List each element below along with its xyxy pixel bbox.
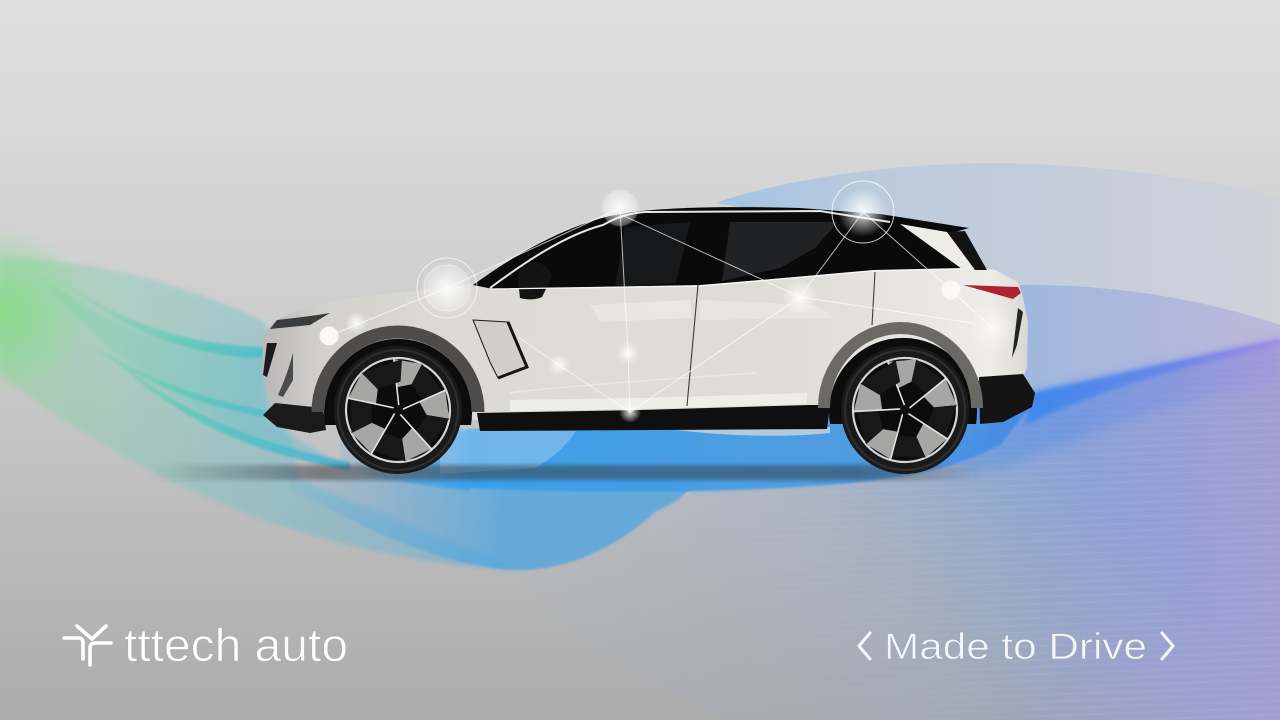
- wave: violet right tint: [1000, 340, 1280, 720]
- node: door left: [548, 354, 570, 376]
- silver roof trim: [490, 211, 890, 288]
- wave: pale arc under front door: [440, 430, 576, 474]
- wave: lower teal edge: [100, 345, 350, 470]
- car: [262, 207, 1035, 489]
- wave: right blue band: [1000, 285, 1280, 400]
- wave: bright ribbon: [1025, 338, 1280, 425]
- wave: teal fill between edges: [40, 275, 350, 470]
- node: front halo: [345, 312, 367, 334]
- window glare front door: [615, 222, 690, 287]
- rear wheel arch: [824, 328, 977, 424]
- node: rear corner: [968, 304, 1016, 352]
- wave: left pale sweep: [0, 258, 520, 570]
- flowing data waves: [0, 163, 1280, 720]
- window glare rear door: [722, 222, 838, 281]
- node: roof front sensor: [600, 188, 640, 228]
- logo: tttech auto: [64, 619, 348, 671]
- node: centre body: [782, 279, 818, 315]
- node: front solid: [320, 326, 338, 346]
- front wheel arch: [318, 332, 478, 425]
- rear pillar: [900, 224, 975, 269]
- rear slit: [1012, 308, 1023, 358]
- wave: under-car blue left: [340, 430, 470, 490]
- car body: [262, 208, 1028, 420]
- node: hood sensor: [417, 258, 477, 318]
- headlight: [270, 313, 330, 329]
- node: roof rear sensor: [832, 181, 894, 243]
- window and roof black: [473, 207, 969, 289]
- tail light: [963, 285, 1021, 299]
- wave: lower right field: [480, 340, 1280, 720]
- rear spoiler gap: [947, 231, 987, 270]
- connection lines: [329, 208, 992, 412]
- side sill: [477, 405, 830, 431]
- rear wheel: [835, 343, 972, 481]
- ground shadow: [150, 465, 985, 480]
- wave: top teal edge: [50, 272, 265, 358]
- front wheel: [319, 334, 474, 489]
- wave: green glow: [0, 227, 90, 397]
- wave: upper right pale blue: [715, 163, 1280, 325]
- node: rear solid: [942, 280, 960, 300]
- node: door centre: [616, 341, 640, 365]
- body reflection front door: [590, 300, 692, 322]
- sensor network overlay: [320, 181, 1016, 423]
- brand name: tttech auto: [124, 619, 348, 671]
- wave ripple texture: [560, 340, 1280, 720]
- front crease: [278, 353, 293, 397]
- front grille slit: [263, 343, 277, 377]
- wave: lower blue lobe: [290, 475, 700, 570]
- shoulder line: [490, 269, 962, 289]
- wave: under-car blue: [468, 395, 1040, 492]
- node: sill: [619, 401, 641, 423]
- door seams: [687, 272, 875, 406]
- tagline text: Made to Drive: [884, 626, 1147, 667]
- wave: pale strip under sill: [670, 427, 830, 436]
- icon: logo mark: [64, 626, 111, 665]
- wave: soft ribbon falloff: [950, 338, 1280, 470]
- sill highlight: [510, 393, 807, 411]
- wave: middle teal edge: [80, 340, 265, 417]
- wing mirror: [517, 262, 552, 299]
- icon: right chevron: [1162, 633, 1173, 659]
- body reflection rear door: [700, 300, 835, 320]
- front bumper lower: [263, 403, 326, 433]
- door crease: [510, 373, 757, 393]
- icon: left chevron: [859, 633, 870, 659]
- rear bumper: [979, 374, 1035, 424]
- charging flap: [473, 320, 527, 378]
- tagline: Made to Drive: [859, 626, 1173, 667]
